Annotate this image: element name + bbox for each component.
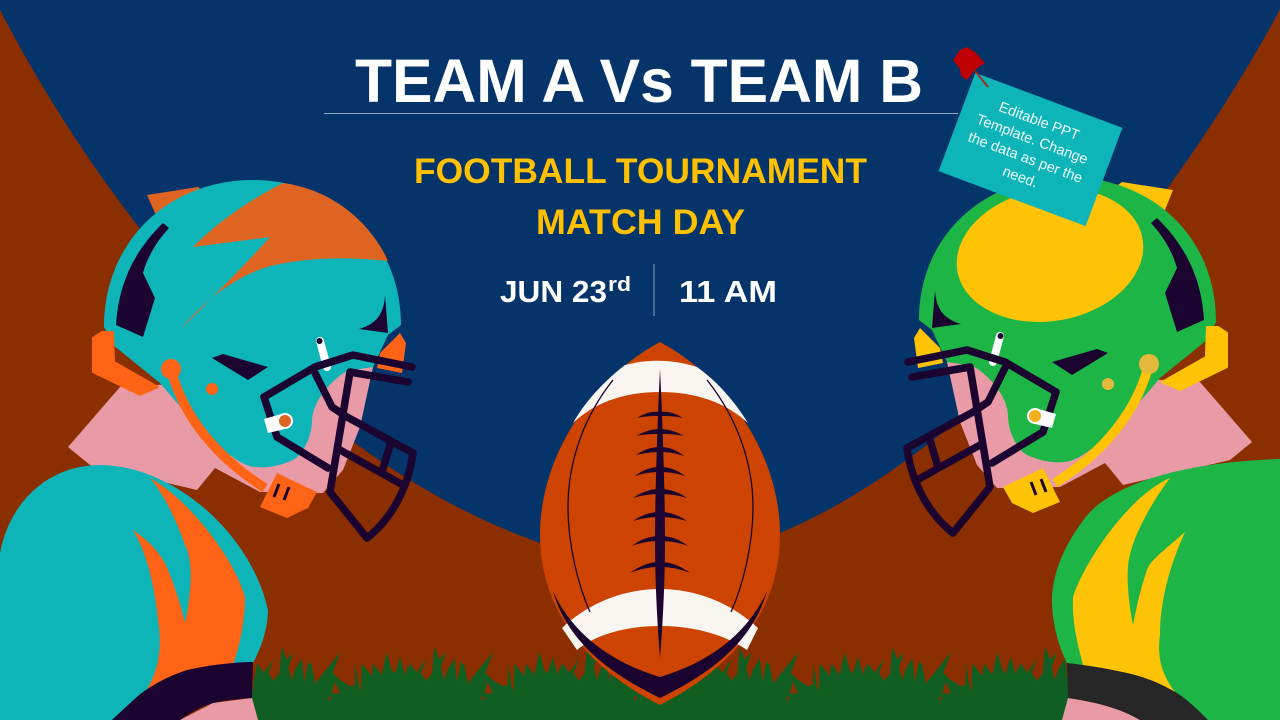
mask clip dot — [1029, 410, 1041, 422]
team B shoulder flame — [1073, 478, 1185, 692]
neck and face — [947, 360, 1252, 488]
note text: the data as per the — [966, 129, 1085, 187]
mask clip cap — [277, 413, 293, 429]
team B pink undershirt — [1062, 698, 1140, 720]
date ordinal suffix: rd — [608, 274, 631, 296]
team B shoulder pad — [1052, 459, 1280, 720]
ear guard — [93, 332, 158, 395]
subtitle line 1: FOOTBALL TOURNAMENT — [414, 152, 867, 191]
helmet ear slot — [1151, 218, 1204, 332]
face mask — [907, 350, 1056, 533]
title underline — [324, 112, 958, 114]
helmet eye slot — [1052, 349, 1108, 375]
center seam — [655, 369, 665, 658]
mask clip — [1035, 408, 1056, 428]
nose guard — [377, 333, 406, 373]
white bolt — [320, 341, 327, 367]
grass strip — [248, 646, 1068, 720]
ball body — [540, 342, 780, 705]
bottom dark crescent — [553, 591, 767, 698]
laces — [630, 412, 690, 573]
red pin head — [953, 47, 985, 80]
pin needle — [975, 71, 988, 87]
top white band — [573, 361, 748, 423]
bolt hole — [998, 333, 1004, 339]
strap button — [1139, 354, 1159, 374]
helmet front vent — [359, 295, 388, 333]
ear guard — [1162, 327, 1227, 390]
helmet shell — [104, 180, 401, 467]
shoulder pad — [0, 465, 268, 720]
helmet crown patch — [946, 174, 1154, 336]
helmet lightning stripe — [180, 183, 388, 330]
chin cup — [260, 473, 317, 518]
match date: JUN 23 — [500, 274, 607, 309]
helmet dot — [206, 383, 218, 395]
bottom white band — [562, 589, 758, 650]
chin cup — [1003, 468, 1060, 513]
chin strap — [1055, 364, 1149, 483]
sticky note — [939, 73, 1122, 226]
jersey collar — [112, 662, 253, 720]
subtitle line 2: MATCH DAY — [536, 203, 745, 242]
date time divider — [653, 264, 655, 316]
chin strap — [171, 369, 265, 488]
white bolt — [993, 336, 1000, 362]
helmet shell — [919, 177, 1216, 462]
strap button — [161, 359, 181, 379]
helmet fin — [147, 187, 215, 225]
note text: Template. Change — [974, 112, 1090, 168]
match time: 11 AM — [679, 274, 777, 309]
chin cup marks — [1031, 479, 1046, 495]
helmet dot — [1102, 378, 1114, 390]
player: team B (green) — [907, 174, 1252, 533]
helmet front vent — [932, 290, 961, 328]
note text: need. — [1000, 164, 1040, 191]
pink undershirt — [180, 698, 258, 720]
face mask — [264, 355, 413, 538]
left side seam — [568, 380, 613, 612]
football — [540, 342, 780, 705]
team B jersey collar — [1067, 663, 1208, 720]
mask clip dot — [279, 415, 291, 427]
shoulder flame — [133, 478, 245, 692]
helmet ear slot — [116, 223, 169, 337]
chin cup marks — [274, 484, 289, 500]
blue sky arc background — [0, 0, 1280, 565]
player: team A (teal) — [0, 180, 413, 720]
helmet eye slot — [212, 354, 268, 380]
neck and face — [68, 365, 373, 493]
right side seam — [707, 380, 753, 612]
mask clip — [264, 413, 285, 433]
helmet fin — [1105, 182, 1173, 220]
title: TEAM A Vs TEAM B — [355, 47, 923, 115]
bolt hole — [316, 338, 322, 344]
nose guard — [914, 328, 943, 368]
mask clip cap — [1027, 408, 1043, 424]
note text: Editable PPT — [996, 99, 1081, 144]
